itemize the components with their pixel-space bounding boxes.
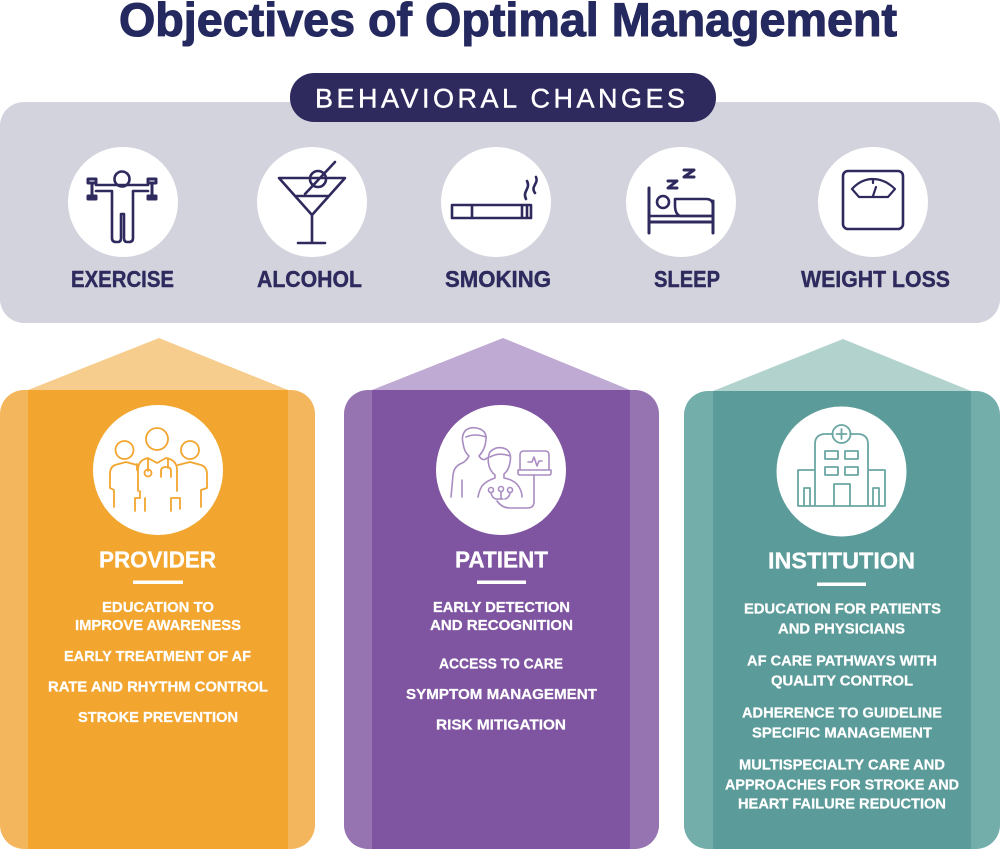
label: sleep: SLEEP: [654, 266, 720, 292]
list: institution objectives: AND PHYSICIANS: [778, 622, 905, 638]
list: provider objectives: [48, 600, 268, 726]
list: institution objectives: QUALITY CONTROL: [771, 674, 913, 690]
list: patient objectives: EARLY DETECTION: [433, 600, 570, 616]
list: institution objectives: APPROACHES FOR STROKE AND: [725, 778, 959, 794]
list: provider objectives: EARLY TREATMENT OF AF: [64, 649, 251, 665]
icon: alcohol: [257, 147, 367, 257]
icon: sleep: [626, 147, 736, 257]
roof: institution: [713, 339, 971, 391]
icon: patient with monitor: [436, 405, 566, 535]
panel: patient: [344, 338, 659, 849]
list: provider objectives: RATE AND RHYTHM CONTROL: [48, 680, 268, 696]
icon: exercise: [68, 147, 178, 257]
list: institution objectives: ADHERENCE TO GUIDELINE: [742, 706, 942, 722]
panel: provider: [0, 338, 315, 849]
heading: institution: INSTITUTION: [768, 548, 915, 574]
banner: behavioral changes: [290, 73, 716, 122]
label: alcohol: ALCOHOL: [257, 266, 362, 292]
icon: care team: [93, 405, 223, 535]
list: patient objectives: ACCESS TO CARE: [439, 656, 563, 672]
list: institution objectives: SPECIFIC MANAGEMENT: [752, 726, 932, 742]
list: patient objectives: [406, 600, 597, 734]
heading: patient: PATIENT: [455, 546, 548, 572]
list: provider objectives: EDUCATION TO: [102, 600, 214, 616]
panel: behavioral changes: [0, 73, 1000, 323]
heading: provider: PROVIDER: [99, 546, 216, 572]
list: patient objectives: RISK MITIGATION: [436, 718, 566, 734]
icon: smoking: [441, 147, 551, 257]
roof: patient: [372, 338, 630, 390]
list: provider objectives: IMPROVE AWARENESS: [75, 618, 241, 634]
list: patient objectives: SYMPTOM MANAGEMENT: [406, 687, 597, 703]
icon: hospital: [776, 406, 906, 536]
list: institution objectives: AF CARE PATHWAYS WITH: [747, 654, 937, 670]
label: smoking: SMOKING: [445, 266, 551, 292]
list: institution objectives: EDUCATION FOR PATIENTS: [744, 602, 941, 618]
label: weight loss: WEIGHT LOSS: [801, 266, 950, 292]
roof: provider: [28, 338, 288, 390]
label: exercise: EXERCISE: [71, 266, 174, 292]
panel: institution: [684, 339, 1000, 849]
list: institution objectives: HEART FAILURE REDUCTION: [738, 796, 946, 812]
banner: behavioral changes: BEHAVIORAL CHANGES: [315, 84, 685, 114]
list: institution objectives: [725, 602, 959, 812]
list: institution objectives: MULTISPECIALTY CARE AND: [739, 758, 945, 774]
list: patient objectives: AND RECOGNITION: [430, 618, 573, 634]
list: provider objectives: STROKE PREVENTION: [78, 710, 238, 726]
icon: weight scale: [818, 147, 928, 257]
